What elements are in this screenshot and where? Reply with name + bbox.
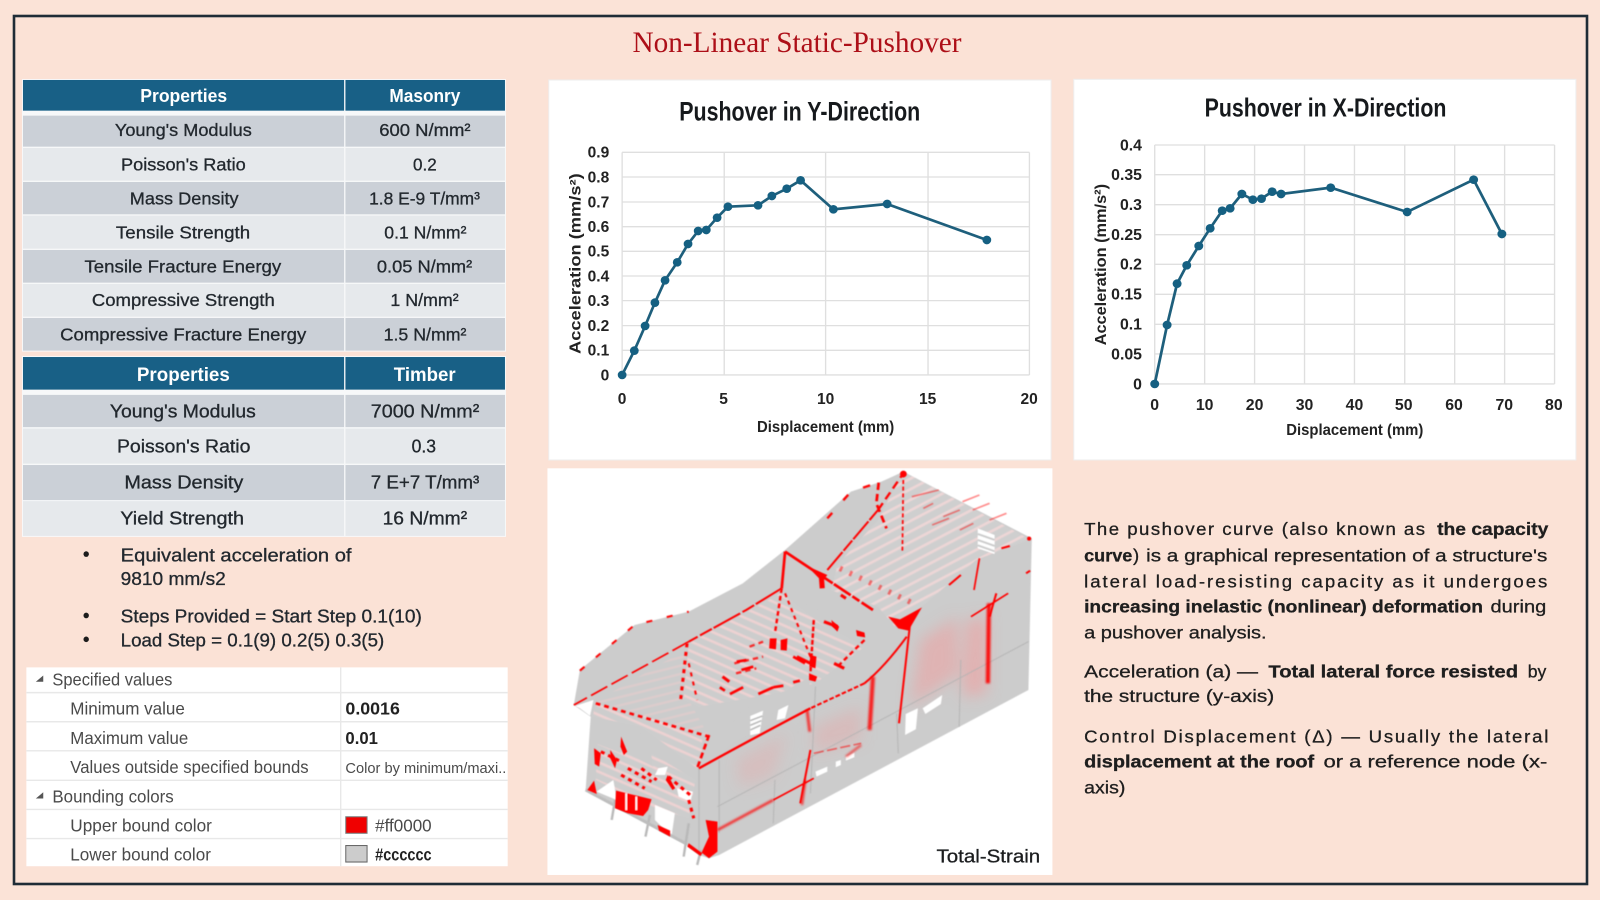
- paragraph: acceleration definition: Total lateral force resisted: [1268, 661, 1518, 681]
- y-axis tick labels: 0.9: [588, 145, 610, 162]
- text block: pushover explanation: [1084, 518, 1549, 797]
- chart title: Pushover in X-Direction: [1205, 93, 1446, 123]
- setting: upper bound color: [70, 815, 432, 836]
- table: timber properties: [22, 356, 506, 537]
- masonry header row: Properties: [140, 85, 227, 106]
- bullet list: load settings: [83, 544, 422, 650]
- x-axis tick labels: 30: [1296, 397, 1314, 414]
- paragraph: pushover curve definition: the capacity: [1437, 518, 1549, 539]
- x-axis tick labels: [618, 391, 1038, 408]
- masonry row: Tensile Strength: [23, 216, 505, 249]
- openings and legs: [575, 528, 1028, 865]
- y-axis tick labels: 0.8: [588, 169, 610, 186]
- paragraph: pushover curve definition: a pushover analysis.: [1084, 622, 1267, 643]
- masonry row: Young's Modulus: [23, 116, 505, 147]
- setting: minimum value: [70, 698, 400, 719]
- setting: values outside specified bounds: [70, 757, 506, 777]
- red strain bands: [574, 471, 1031, 803]
- masonry row: Compressive Fracture Energy: 1.5 N/mm²: [384, 325, 466, 345]
- paragraph: control displacement definition: [1084, 726, 1548, 797]
- y-axis title: Acceleration (mm/s²): [1093, 184, 1110, 345]
- y-axis tick labels: 0.05: [1111, 347, 1142, 363]
- y-axis tick labels: [588, 145, 610, 384]
- table: masonry properties: [22, 79, 506, 352]
- data series: Y-direction curve: [618, 176, 991, 379]
- masonry header row: Masonry: [389, 85, 461, 106]
- setting: maximum value: [70, 728, 378, 748]
- paragraph: control displacement definition: axis): [1084, 777, 1125, 797]
- bullet text: steps provided: Steps Provided = Start Step 0.1(10): [121, 605, 422, 627]
- masonry row: Mass Density: 1.8 E-9 T/mm³: [369, 188, 480, 208]
- red dashed roof edges and marks: [580, 483, 1006, 818]
- x-axis tick labels: 5: [719, 391, 728, 408]
- blurred wall strain streaks: [717, 603, 989, 830]
- y-axis tick labels: 0: [1133, 377, 1142, 393]
- paragraph: pushover curve definition: during: [1490, 596, 1546, 617]
- x-axis tick labels: 50: [1395, 397, 1413, 414]
- panel: total-strain building model: [547, 468, 1052, 875]
- y-axis tick labels: 0.35: [1111, 167, 1142, 184]
- paragraph: pushover curve definition: [1084, 518, 1549, 643]
- title: Non-Linear Static-Pushover: [632, 26, 962, 59]
- timber row: Poisson's Ratio: [23, 429, 505, 464]
- setting: lower bound color: Lower bound color: [70, 844, 211, 865]
- y-axis tick labels: 0.3: [1120, 197, 1142, 214]
- x-axis tick labels: 0: [618, 391, 626, 408]
- bullet list: load settings: 9810 mm/s2: [121, 568, 226, 589]
- paragraph: acceleration definition: Acceleration (a) —: [1084, 661, 1259, 681]
- paragraph: acceleration definition: by: [1528, 661, 1547, 681]
- paragraph: pushover curve definition: curve: [1084, 545, 1132, 565]
- timber row: Young's Modulus: Young's Modulus: [110, 400, 256, 421]
- paragraph: acceleration definition: the structure (y-axis): [1084, 685, 1274, 706]
- building body: [574, 472, 1032, 858]
- timber row: Poisson's Ratio: 0.3: [412, 435, 436, 456]
- x-axis tick labels: 80: [1545, 397, 1563, 414]
- panel: specified values settings table: [26, 667, 508, 866]
- masonry row: Compressive Fracture Energy: Compressive Fracture Energy: [60, 325, 307, 345]
- masonry row: Tensile Fracture Energy: [23, 250, 505, 283]
- group heading: specified values: Specified values: [52, 669, 172, 690]
- panel: pushover chart X-direction: [1074, 79, 1576, 460]
- masonry row: Young's Modulus: 600 N/mm²: [379, 120, 470, 140]
- masonry row: Compressive Strength: Compressive Strength: [92, 290, 275, 310]
- masonry row: Tensile Fracture Energy: 0.05 N/mm²: [377, 257, 472, 277]
- masonry row: Poisson's Ratio: [23, 148, 505, 181]
- setting: maximum value: Maximum value: [70, 728, 188, 748]
- y-axis tick labels: 0.7: [588, 194, 609, 211]
- timber row: Young's Modulus: [23, 395, 505, 427]
- timber row: Young's Modulus: 7000 N/mm²: [371, 400, 479, 421]
- masonry row: Compressive Strength: 1 N/mm²: [390, 290, 459, 310]
- setting: upper bound color: Upper bound color: [70, 815, 212, 836]
- data series: X-direction curve: [1150, 175, 1506, 388]
- timber row: Mass Density: 7 E+7 T/mm³: [371, 471, 479, 493]
- masonry row: Compressive Strength: [23, 284, 505, 317]
- y-axis tick labels: [1111, 138, 1142, 393]
- x-axis tick labels: 20: [1020, 391, 1038, 408]
- y-axis tick labels: 0.1: [1120, 317, 1142, 334]
- setting: lower bound color: [70, 844, 432, 865]
- y-axis tick labels: 0.4: [1120, 138, 1142, 154]
- paragraph: control displacement definition: Control Displacement (Δ) — Usually the lateral: [1084, 726, 1548, 746]
- masonry row: Mass Density: Mass Density: [130, 188, 240, 208]
- paragraph: control displacement definition: displacement at the roof: [1084, 751, 1315, 771]
- x-axis tick labels: 15: [919, 391, 937, 408]
- x-axis tick labels: 10: [817, 391, 834, 408]
- bullet text: load step: Load Step = 0.1(9) 0.2(5) 0.3(5): [121, 629, 384, 650]
- setting: lower bound color: #cccccc: [375, 844, 432, 865]
- setting: upper bound color: #ff0000: [375, 815, 432, 836]
- group heading: bounding colors: Bounding colors: [52, 786, 174, 806]
- timber header row: Timber: [394, 365, 456, 386]
- setting: maximum value: 0.01: [345, 728, 378, 748]
- y-axis tick labels: 0.25: [1111, 227, 1142, 244]
- paragraph: pushover curve definition: is a graphical representation of a structure's: [1146, 545, 1547, 565]
- timber header row: Properties: [137, 365, 230, 386]
- setting: values outside specified bounds: Values outside specified bounds: [70, 757, 309, 777]
- y-axis tick labels: 0.3: [588, 293, 610, 310]
- x-axis tick labels: 60: [1445, 397, 1463, 414]
- masonry row: Poisson's Ratio: 0.2: [413, 155, 437, 175]
- timber row: Mass Density: Mass Density: [124, 471, 244, 493]
- x-axis tick labels: [1150, 397, 1563, 414]
- timber row: Poisson's Ratio: Poisson's Ratio: [117, 435, 250, 456]
- x-axis tick labels: 20: [1246, 397, 1264, 414]
- masonry row: Tensile Strength: Tensile Strength: [116, 222, 250, 242]
- timber header row: [23, 357, 505, 390]
- timber row: Yield Strength: [23, 501, 505, 536]
- masonry row: Compressive Fracture Energy: [23, 318, 505, 351]
- soft strain patches: [736, 617, 986, 787]
- bullet text: equivalent acceleration: Equivalent acceleration of: [121, 544, 352, 566]
- panel: pushover chart Y-direction: [549, 80, 1051, 460]
- masonry row: Tensile Strength: 0.1 N/mm²: [384, 222, 466, 242]
- y-axis tick labels: 0.1: [588, 343, 610, 360]
- y-axis title: Acceleration (mm/s²): [567, 173, 585, 354]
- timber row: Yield Strength: Yield Strength: [120, 507, 244, 529]
- y-axis tick labels: 0.4: [588, 268, 610, 285]
- masonry header row: [23, 80, 505, 111]
- y-axis tick labels: 0.5: [588, 244, 610, 261]
- paragraph: control displacement definition: or a reference node (x-: [1323, 751, 1547, 771]
- paragraph: pushover curve definition: The pushover curve (also known as: [1084, 518, 1425, 539]
- masonry row: Mass Density: [23, 182, 505, 214]
- total-strain label: Total-Strain: [936, 846, 1040, 867]
- red strain blobs: [587, 620, 865, 858]
- chart title: Pushover in Y-Direction: [679, 97, 920, 127]
- y-axis tick labels: 0.15: [1111, 287, 1142, 304]
- y-axis tick labels: 0.6: [588, 219, 610, 236]
- timber row: Mass Density: [23, 465, 505, 500]
- x-axis tick labels: 70: [1495, 397, 1513, 414]
- masonry row: Poisson's Ratio: Poisson's Ratio: [121, 155, 246, 175]
- masonry row: Tensile Fracture Energy: Tensile Fracture Energy: [84, 257, 282, 277]
- y-axis tick labels: 0.2: [588, 318, 609, 335]
- paragraph: pushover curve definition: increasing inelastic (nonlinear) deformation: [1084, 596, 1483, 617]
- y-axis tick labels: 0: [601, 367, 609, 384]
- x-axis title: Displacement (mm): [757, 419, 894, 436]
- masonry row: Young's Modulus: Young's Modulus: [115, 120, 252, 140]
- paragraph: acceleration definition: [1084, 661, 1547, 706]
- setting: minimum value: Minimum value: [70, 698, 185, 719]
- x-axis tick labels: 40: [1346, 397, 1364, 414]
- timber row: Yield Strength: 16 N/mm²: [383, 507, 467, 529]
- setting: values outside specified bounds: Color by minimum/maxi..: [345, 761, 506, 777]
- y-axis tick labels: 0.2: [1120, 257, 1142, 274]
- x-axis tick labels: 10: [1196, 397, 1214, 414]
- setting: minimum value: 0.0016: [345, 698, 400, 719]
- paragraph: pushover curve definition: lateral load-resisting capacity as it undergoes: [1084, 571, 1547, 591]
- x-axis tick labels: 0: [1150, 397, 1159, 414]
- paragraph: pushover curve definition: ): [1133, 545, 1139, 565]
- x-axis title: Displacement (mm): [1286, 422, 1423, 439]
